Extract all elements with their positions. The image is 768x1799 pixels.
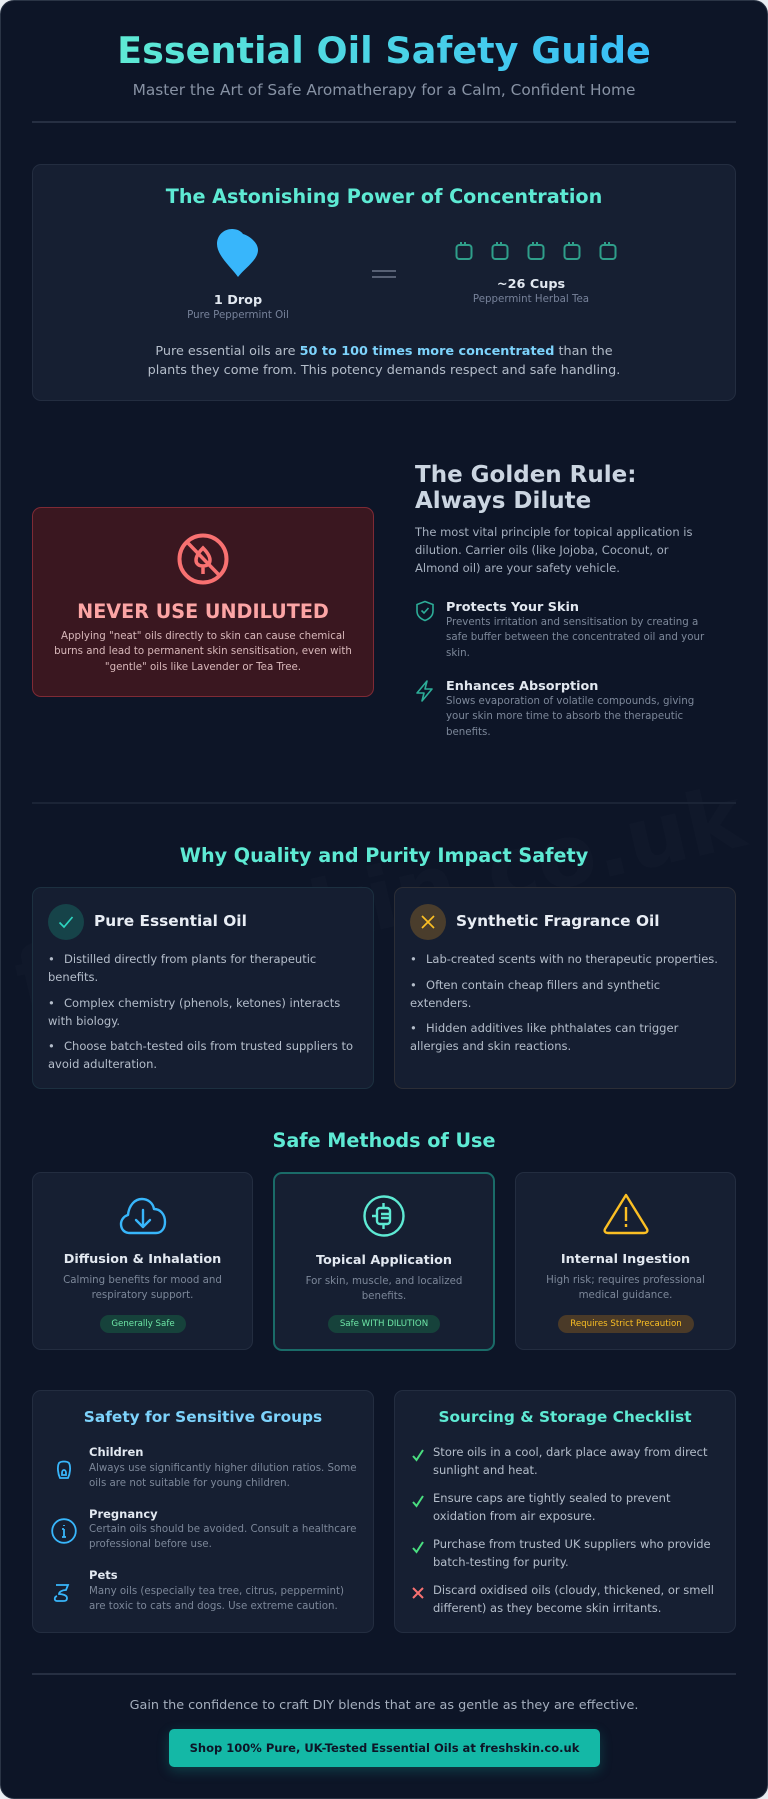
warning heading: NEVER USE UNDILUTED [77,600,329,623]
method text: For skin, muscle, and localized [306,1275,462,1287]
method text [63,1274,222,1301]
group text: oils are not suitable for young children. [89,1477,290,1489]
item text [433,1445,708,1477]
icon: check [411,1540,425,1554]
icon: check [412,1450,424,1462]
group text: professional before use. [89,1538,212,1550]
concentration text [148,344,620,378]
concentration text: Pure essential oils are 50 to 100 times more concentrated than the [155,344,613,359]
icon: cloud download [120,1198,166,1234]
method title: Topical Application [316,1253,452,1268]
panel: diffusion and inhalation [32,1172,253,1350]
item text: batch-testing for purity. [433,1555,569,1569]
item text: Purchase from trusted UK suppliers who provide [433,1537,711,1551]
icon: tea cups [456,242,616,260]
benefit text: Prevents irritation and sensitisation by creating a [446,616,698,628]
panel: never use undiluted [32,507,374,697]
watermark: freshskin.co.uk [6,768,753,1032]
bullet list: • [48,1039,55,1053]
sublabel: peppermint herbal tea: Peppermint Herbal Tea [473,293,589,305]
text: golden rule [414,525,692,575]
group text: are toxic to cats and dogs. Use extreme caution. [89,1600,338,1612]
icon: warning triangle [603,1194,649,1234]
icon: prohibited [178,534,228,584]
bullet list: Lab-created scents with no therapeutic properties. [426,952,718,966]
benefit: protects skin [416,600,704,659]
card title: Pure Essential Oil [94,912,247,930]
bullet list: Hidden additives like phthalates can trigger [426,1021,678,1035]
bullet list: • [48,996,55,1010]
method text [306,1275,462,1302]
icon: check circle [48,904,84,940]
benefit text: skin. [446,647,470,659]
icon: topical [363,1195,405,1237]
method title: Diffusion & Inhalation [64,1252,221,1267]
heading: quality and purity: Why Quality and Purity Impact Safety [180,844,588,867]
benefit text: benefits. [446,726,491,738]
checklist item 3 [395,1535,735,1571]
icon: pets [54,1584,70,1602]
group text: Many oils (especially tea tree, citrus, peppermint) [89,1585,344,1597]
label: 1 drop: 1 Drop [214,293,262,308]
icon: cross circle [410,904,446,940]
benefit text: safe buffer between the concentrated oil and your [446,631,704,643]
benefit title: Enhances Absorption [446,679,598,694]
badge: strict precaution [558,1315,694,1333]
badge: safe with dilution [328,1315,440,1333]
badge: safe with dilution: Safe WITH DILUTION [340,1319,428,1329]
bullet list: extenders. [410,996,471,1010]
heading: golden rule [415,462,636,514]
panel: concentration [32,164,736,401]
badge: generally safe: Generally Safe [111,1319,175,1329]
icon: check [412,1496,424,1508]
group title: Children [89,1445,143,1459]
group text: Certain oils should be avoided. Consult a healthcare [89,1523,356,1535]
heading: sensitive groups: Safety for Sensitive Groups [84,1408,322,1426]
bullet list: • [48,952,55,966]
icon: cross [411,1586,425,1600]
heading: golden rule: The Golden Rule: [415,462,636,488]
text: golden rule: Almond oil) are your safety vehicle. [415,561,620,575]
method title: Internal Ingestion [561,1252,690,1267]
bullet list: avoid adulteration. [48,1057,157,1071]
group: pregnancy [51,1507,356,1550]
concentration text: plants they come from. This potency demands respect and safe handling. [148,363,620,378]
sublabel: pure peppermint oil: Pure Peppermint Oil [187,309,289,321]
item text: Store oils in a cool, dark place away from direct [433,1445,707,1459]
panel: sensitive groups [32,1390,374,1633]
checklist item 1 [412,1445,708,1477]
badge: strict precaution: Requires Strict Precaution [570,1319,682,1329]
item text: Ensure caps are tightly sealed to prevent [433,1491,670,1505]
benefit text [446,695,694,738]
panel: pure essential oil [32,887,374,1089]
benefit text: your skin more time to absorb the therapeutic [446,710,683,722]
method text: medical guidance. [579,1289,672,1301]
method text: benefits. [362,1290,406,1302]
group title: Pregnancy [89,1507,158,1521]
group text [89,1462,357,1489]
bullet list [48,952,353,1071]
icon: lightning [416,680,433,702]
benefit text: Slows evaporation of volatile compounds, giving [446,695,694,707]
benefit title: Protects Your Skin [446,600,579,615]
equals sign [372,270,396,278]
card title: Synthetic Fragrance Oil [456,912,660,930]
item text: different) as they become skin irritants. [433,1601,661,1615]
item text [433,1535,711,1571]
method text: Calming benefits for mood and [63,1274,222,1286]
icon: children [57,1460,71,1479]
checklist item 2 [412,1491,670,1523]
warning text: Applying "neat" oils directly to skin can cause chemical [61,630,345,642]
bullet list: Complex chemistry (phenols, ketones) interacts [64,996,340,1010]
item text: Discard oxidised oils (cloudy, thickened, or smell [433,1583,714,1597]
group title: Pets [89,1568,118,1582]
text: golden rule: dilution. Carrier oils (like Jojoba, Coconut, or [415,543,668,557]
group: children [57,1445,357,1489]
method text: respiratory support. [92,1289,193,1301]
method text [546,1274,705,1301]
warning text: "gentle" oils like Lavender or Tea Tree. [105,661,301,673]
label: 26 cups: ~26 Cups [497,277,565,292]
panel: synthetic fragrance oil [394,887,736,1089]
benefit text [446,616,704,659]
badge: generally safe [100,1315,186,1333]
group text: Always use significantly higher dilution ratios. Some [89,1462,357,1474]
warning text [54,630,352,673]
item text [433,1491,670,1523]
bullet list: with biology. [48,1014,120,1028]
panel: sourcing and storage [394,1390,736,1633]
method text: High risk; requires professional [546,1274,705,1286]
panel: topical application [273,1172,495,1351]
bullet list: allergies and skin reactions. [410,1039,571,1053]
bullet list: Choose batch-tested oils from trusted suppliers to [64,1039,353,1053]
benefit: enhances absorption [416,679,694,738]
bullet list: • [410,978,417,992]
heading: golden rule: Always Dilute [415,488,591,514]
subtitle: Master the Art of Safe Aromatherapy for a Calm, Confident Home [133,81,635,99]
icon: oil drop [217,229,258,277]
bullet list: • [410,952,417,966]
panel: internal ingestion [515,1172,736,1350]
group text [89,1523,356,1550]
heading: checklist: Sourcing & Storage Checklist [438,1408,692,1426]
icon: shield [416,600,434,622]
item text: oxidation from air exposure. [433,1509,595,1523]
title: Essential Oil Safety Guide [117,29,651,72]
bullet list [410,952,718,1053]
call-to-action button [169,1729,600,1767]
call-to-action button: Shop 100% Pure, UK-Tested Essential Oils at freshskin.co.uk [190,1741,579,1755]
item text [433,1581,714,1617]
group: pets [54,1568,344,1612]
bullet list: Distilled directly from plants for therapeutic [64,952,316,966]
bullet list: Often contain cheap fillers and synthetic [426,978,660,992]
bullet list: • [410,1021,417,1035]
warning text: burns and lead to permanent skin sensitisation, even with [54,645,352,657]
bullet list: benefits. [48,970,98,984]
checklist item 4 [395,1581,735,1617]
text: golden rule: The most vital principle for topical application is [415,525,692,539]
heading: safe methods: Safe Methods of Use [272,1129,496,1152]
closing text: Gain the confidence to craft DIY blends that are as gentle as they are effective. [130,1698,638,1713]
icon: info circle [51,1518,77,1544]
heading: concentration: The Astonishing Power of Concentration [166,185,602,208]
group text [89,1585,344,1612]
item text: sunlight and heat. [433,1463,538,1477]
